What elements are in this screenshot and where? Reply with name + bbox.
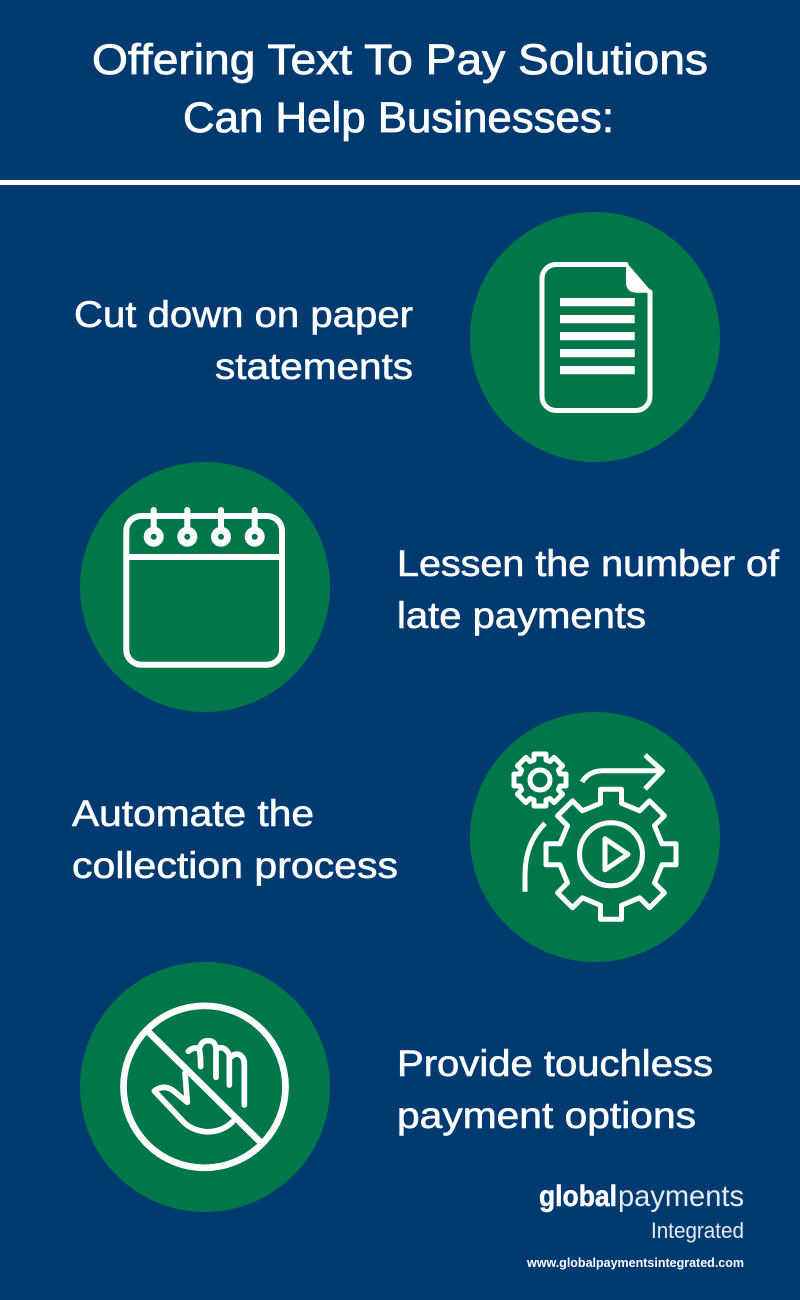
text: cut down on paper statements: statements [215, 346, 413, 387]
icon: no-touch hand [80, 962, 330, 1212]
title: Offering Text To Pay Solutions [92, 36, 708, 84]
text: automate the collection process: Automate the [72, 793, 314, 834]
logo: global payments integrated: payments [618, 1180, 744, 1213]
panel: late payments [80, 462, 780, 712]
panel: touchless payment [80, 962, 713, 1212]
text: lessen the number of late payments: late payments [397, 595, 646, 636]
icon: calendar [80, 462, 330, 712]
text: automate the collection process [72, 793, 398, 886]
text: automate the collection process: collection process [72, 845, 398, 886]
title: Can Help Businesses: [183, 94, 614, 142]
icon: document [470, 212, 720, 462]
text: cut down on paper statements: Cut down on paper [74, 294, 413, 335]
logo: global payments integrated [539, 1180, 744, 1243]
text: provide touchless payment options [397, 1043, 713, 1136]
logo: global payments integrated: Integrated [651, 1218, 744, 1243]
panel: paper statements [74, 212, 720, 462]
text: lessen the number of late payments: Lessen the number of [397, 543, 780, 584]
icon: gears with play button [470, 712, 720, 962]
website url: www.globalpaymentsintegrated.com [526, 1256, 744, 1270]
panel: automate collection [72, 712, 720, 962]
text: lessen the number of late payments [397, 543, 780, 636]
logo: global payments integrated: global [539, 1180, 617, 1213]
text: cut down on paper statements [74, 294, 413, 387]
title [92, 36, 708, 142]
text: provide touchless payment options: Provide touchless [397, 1043, 713, 1084]
text: provide touchless payment options: payment options [397, 1095, 696, 1136]
